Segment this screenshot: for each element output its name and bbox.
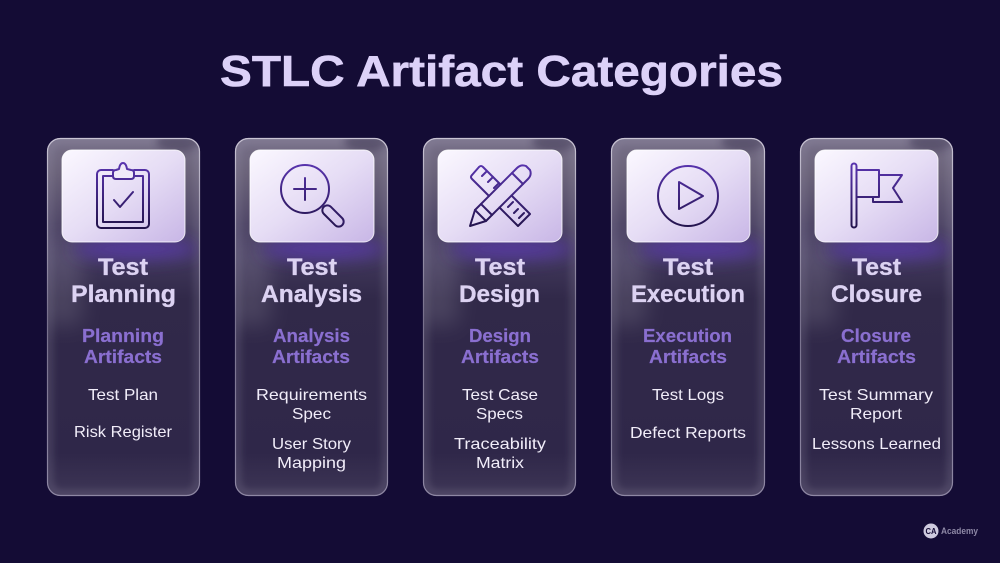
panel: test analysis bbox=[230, 133, 388, 496]
icon tile bbox=[250, 150, 374, 242]
heading: Test bbox=[287, 254, 337, 281]
panel: test design: Traceability bbox=[454, 436, 546, 453]
panel: test analysis: Spec bbox=[292, 406, 331, 423]
panel: test planning: Planning bbox=[71, 281, 176, 308]
panel: test closure: Report bbox=[850, 406, 903, 423]
icon: play button bbox=[658, 166, 718, 226]
icon: magnifier bbox=[281, 165, 346, 229]
heading: Test bbox=[475, 254, 525, 281]
logo: CA Academy: CA bbox=[926, 527, 937, 536]
icon tile bbox=[627, 150, 750, 242]
panel: test analysis: Mapping bbox=[277, 455, 346, 472]
logo: CA Academy: Academy bbox=[941, 526, 978, 536]
panel: test closure bbox=[795, 133, 953, 496]
icon tile bbox=[438, 150, 562, 242]
icon tile bbox=[62, 150, 185, 242]
icon: flag bbox=[852, 164, 902, 228]
artifact category: Design bbox=[469, 325, 531, 346]
artifact category: Analysis bbox=[273, 325, 350, 346]
heading: Test bbox=[98, 254, 148, 281]
icon tile bbox=[815, 150, 938, 242]
icon: pencil and ruler bbox=[470, 165, 531, 226]
icon: clipboard bbox=[97, 163, 149, 228]
panel: test analysis: Analysis bbox=[261, 281, 362, 308]
panel: test execution bbox=[606, 133, 765, 496]
panel: test execution: Execution bbox=[631, 281, 745, 308]
panel: test execution: Artifacts bbox=[649, 346, 727, 367]
panel: test planning bbox=[42, 133, 200, 496]
artifact category: Execution bbox=[643, 325, 732, 346]
heading: Test bbox=[663, 254, 713, 281]
panel: test execution: Defect Reports bbox=[630, 425, 746, 442]
heading: Test bbox=[852, 254, 901, 281]
panel: test design: Artifacts bbox=[461, 346, 539, 367]
panel: test closure: Closure bbox=[831, 281, 922, 308]
panel: test planning: Risk Register bbox=[74, 424, 173, 441]
panel: test design: Matrix bbox=[476, 455, 524, 472]
panel: test closure: Artifacts bbox=[837, 346, 916, 367]
panel: test design: Specs bbox=[476, 406, 523, 423]
panel: test design bbox=[418, 133, 576, 496]
panel: test closure: Lessons Learned bbox=[812, 436, 941, 453]
panel: test analysis: Artifacts bbox=[272, 346, 350, 367]
title: STLC Artifact Categories bbox=[220, 47, 783, 96]
artifact items: Test Summary bbox=[819, 387, 933, 404]
panel: test analysis: User Story bbox=[272, 436, 351, 453]
artifact items: Test Case bbox=[462, 387, 538, 404]
artifact category: Closure bbox=[841, 325, 911, 346]
artifact category: Planning bbox=[82, 325, 164, 346]
panel: test planning: Artifacts bbox=[84, 346, 162, 367]
artifact items: Requirements bbox=[256, 387, 367, 404]
artifact items: Test Plan bbox=[88, 387, 158, 404]
logo: CA Academy bbox=[924, 524, 978, 538]
panel: test design: Design bbox=[459, 281, 540, 308]
artifact items: Test Logs bbox=[652, 387, 724, 404]
